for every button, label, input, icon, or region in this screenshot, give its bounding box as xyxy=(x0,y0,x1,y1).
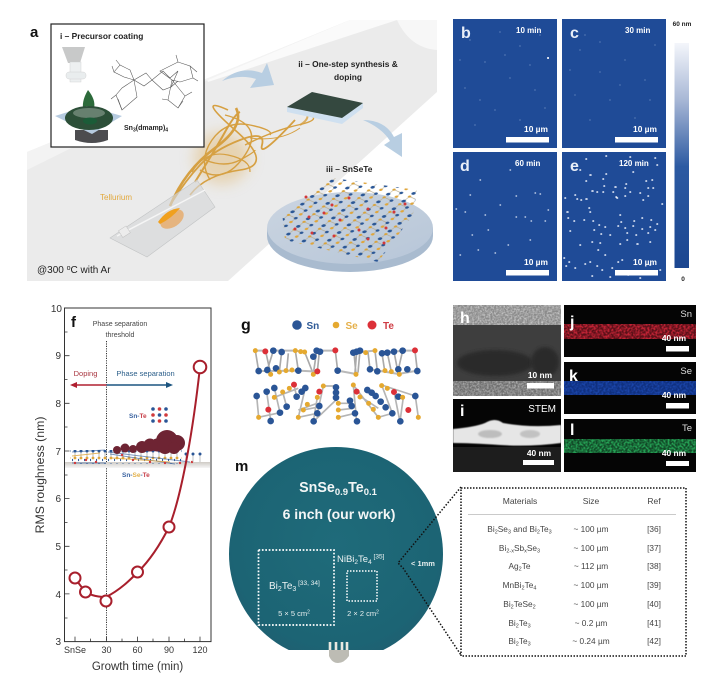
NiBi2Te4 label: NiBi xyxy=(337,554,354,565)
SnSeTe film on disc xyxy=(267,170,433,272)
table rows: ~ 100 µm xyxy=(574,524,609,534)
AFM map c: c xyxy=(570,25,579,42)
x axis tick labels: 120 xyxy=(192,645,208,655)
AFM map d: d xyxy=(460,158,470,175)
panel: j Sn EDS map: 40 nm xyxy=(662,333,686,343)
table rows: 2 xyxy=(516,642,519,648)
label: temperature and gas: @300 xyxy=(37,265,64,276)
2x2 size label: 2 xyxy=(376,610,379,616)
arrow: synthesis to film xyxy=(363,120,402,157)
table rows: 3 xyxy=(528,642,531,648)
y axis tick labels xyxy=(51,304,62,648)
table header: Materials xyxy=(503,496,537,506)
AFM map c xyxy=(562,19,666,148)
Bi2Te3 label: 3 xyxy=(292,586,296,593)
substrate wafer ii xyxy=(287,92,363,124)
panel: g crystal structure xyxy=(241,317,418,422)
table rows: Sb xyxy=(514,543,524,553)
NiBi2Te4 label: Te xyxy=(358,554,368,565)
heading: one-step synthesis: ii – One-step synthesis & xyxy=(298,59,398,69)
x axis tick labels: SnSe xyxy=(64,645,86,655)
y axis title: RMS roughness (nm) xyxy=(33,417,47,533)
table rows: x xyxy=(524,548,527,554)
x axis tick labels xyxy=(64,645,208,655)
panel: j Sn EDS map: Sn xyxy=(680,309,692,320)
panel: k Se EDS map xyxy=(564,362,696,414)
AFM map b xyxy=(453,19,557,148)
table rows: Se xyxy=(498,524,508,534)
table rows: 3 xyxy=(549,530,552,536)
panel: h TEM image: 10 nm xyxy=(528,370,552,380)
doping arrow: Doping xyxy=(74,369,97,378)
y axis tick labels: 9 xyxy=(55,351,61,362)
panel: k Se EDS map: Se xyxy=(680,366,692,377)
wafer title: Te xyxy=(348,480,364,496)
wafer disc xyxy=(229,447,443,663)
Sn-Se-Te label: Sn-Se-Te xyxy=(122,472,150,479)
table rows: Te xyxy=(525,580,534,590)
table rows: Bi xyxy=(487,524,495,534)
panel label f: f xyxy=(71,314,77,331)
table rows: 4 xyxy=(533,586,536,592)
plot frame and ticks xyxy=(64,308,211,642)
table rows: 2 xyxy=(533,604,536,610)
table rows xyxy=(487,524,661,648)
5x5 size label: 2 xyxy=(307,610,310,616)
threshold label xyxy=(93,321,147,339)
legend: Sn Se Te: Sn xyxy=(306,321,319,332)
panel: j Sn EDS map xyxy=(564,305,696,357)
table rows: [42] xyxy=(647,636,661,646)
table rows: 2 xyxy=(519,566,522,572)
table rows: 2-x xyxy=(506,548,514,554)
table rows: 3 xyxy=(528,624,531,630)
table rows: Te xyxy=(522,561,531,571)
2x2 dotted region xyxy=(347,571,377,601)
SnSeTe film with phase-separated clusters xyxy=(65,430,210,468)
table rows: ~ 100 µm xyxy=(574,599,609,609)
label: Sn3(dmamp)4: 4 xyxy=(165,128,168,134)
AFM map d: 10 µm xyxy=(524,257,548,267)
panel label a: a xyxy=(30,24,39,41)
Sn-Te cluster label and lattice: Sn-Te xyxy=(129,413,147,420)
y axis tick labels: 10 xyxy=(51,304,62,315)
wafer title: 0.9 xyxy=(335,487,348,498)
table rows: [38] xyxy=(647,561,661,571)
5x5 dotted region xyxy=(258,550,334,625)
panel: l Te EDS map xyxy=(564,419,696,472)
table rows: [39] xyxy=(647,580,661,590)
table rows: and Bi xyxy=(511,524,537,534)
tellurium vapor plume xyxy=(170,106,314,206)
heading: SnSeTe: iii – SnSeTe xyxy=(326,164,373,174)
table rows: 2 xyxy=(495,530,498,536)
icon: precursor drop xyxy=(83,90,94,110)
y axis tick labels: 8 xyxy=(55,399,61,410)
NiBi2Te4 label: [35] xyxy=(372,554,385,560)
AFM map e: e xyxy=(570,158,579,175)
legend: Sn Se Te: Te xyxy=(383,321,394,332)
table header: Size xyxy=(583,496,600,506)
atomic lattice xyxy=(255,350,418,422)
legend: Sn Se Te: Se xyxy=(346,321,358,332)
table rows: 2 xyxy=(522,586,525,592)
2x2 size label: 2 × 2 cm xyxy=(347,609,376,618)
y axis tick labels: 7 xyxy=(55,447,61,458)
x axis tick labels: 30 xyxy=(101,645,112,655)
panel: a synthesis schematic xyxy=(27,20,437,281)
wafer connector tab xyxy=(329,641,349,663)
panel: h TEM image xyxy=(453,305,561,396)
colour scale bar xyxy=(673,21,692,283)
table header xyxy=(503,496,661,506)
wafer size label: 6 inch (our work) xyxy=(283,506,395,522)
table rows: ~ 0.2 µm xyxy=(575,618,607,628)
comparison table xyxy=(461,488,686,656)
panel: k Se EDS map: 40 nm xyxy=(662,390,686,400)
data point markers xyxy=(70,361,206,606)
y axis tick labels: 5 xyxy=(55,542,61,553)
furnace tube floor xyxy=(27,20,437,281)
x axis title: Growth time (min) xyxy=(92,661,183,673)
table rows: [36] xyxy=(647,524,661,534)
AFM map c: 30 min xyxy=(625,26,650,35)
panel label m: m xyxy=(235,458,248,475)
table header: Ref xyxy=(647,496,661,506)
table rows: ~ 112 µm xyxy=(574,561,608,571)
table rows: 2 xyxy=(516,624,519,630)
panel: i STEM image: i xyxy=(460,403,464,420)
table dotted frame xyxy=(461,488,686,656)
panel: f roughness chart xyxy=(33,304,211,673)
NiBi2Te4 label: 4 xyxy=(368,559,372,566)
table rows: Bi xyxy=(503,599,511,609)
phase separation arrow xyxy=(106,369,175,388)
y axis tick labels: 3 xyxy=(55,637,61,648)
threshold label: Phase separation xyxy=(93,321,147,328)
arrow: precursor to synthesis xyxy=(222,63,274,88)
icon: syringe filter xyxy=(62,47,86,82)
panel: i STEM image: 40 nm xyxy=(527,448,551,458)
AFM map b: b xyxy=(461,25,471,42)
threshold label: threshold xyxy=(106,332,135,339)
wafer title: 0.1 xyxy=(364,487,378,498)
phase separation arrow: Phase separation xyxy=(116,369,175,378)
table rows: [41] xyxy=(647,618,661,628)
table rows: ~ 100 µm xyxy=(574,543,609,553)
AFM map c: 10 µm xyxy=(633,124,657,134)
NiBi2Te4 label: 2 xyxy=(354,559,358,566)
table rows: 3 xyxy=(508,530,511,536)
table rows: Te xyxy=(540,524,549,534)
panel: l Te EDS map: 40 nm xyxy=(662,448,686,458)
legend: Sn Se Te xyxy=(292,320,394,332)
Bi2Te3 label: Bi xyxy=(269,581,278,592)
AFM map d xyxy=(453,152,557,281)
panel: i STEM image: STEM xyxy=(528,404,556,415)
colour scale bar: 0 xyxy=(681,276,685,283)
icon: spin coater with substrate xyxy=(55,106,122,143)
table rows: [40] xyxy=(647,599,661,609)
x axis tick labels: 60 xyxy=(132,645,143,655)
AFM map b: 10 min xyxy=(516,26,541,35)
molecule: Sn3(dmamp)4 structure xyxy=(111,55,198,110)
table rows: 2 xyxy=(537,530,540,536)
table rows: Te xyxy=(519,636,528,646)
zoom connector lines xyxy=(398,487,461,655)
label: Sn3(dmamp)4: 3 xyxy=(133,128,136,134)
table rows: ~ 100 µm xyxy=(574,580,609,590)
table rows: Bi xyxy=(508,636,516,646)
label: Sn3(dmamp)4: Sn xyxy=(124,125,133,132)
panel: i STEM image xyxy=(453,399,561,472)
panel: l Te EDS map: l xyxy=(570,422,574,439)
doping arrow xyxy=(70,369,106,388)
panel label g: g xyxy=(241,317,251,334)
x axis tick labels: 90 xyxy=(164,645,174,655)
AFM map e: 120 min xyxy=(619,159,649,168)
table rows: 3 xyxy=(537,548,540,554)
table rows: Ag xyxy=(509,561,519,571)
Bi2Te3 label: Te xyxy=(282,581,293,592)
Sn-Te cluster label and lattice xyxy=(129,409,166,421)
label: Tellurium: Tellurium xyxy=(100,193,132,202)
quartz boat with tellurium xyxy=(110,180,215,257)
small area label: < 1mm xyxy=(411,559,435,568)
tellurium dopant atoms xyxy=(295,197,405,243)
label: temperature and gas: o xyxy=(67,265,71,272)
heading: doping: doping xyxy=(334,72,362,82)
AFM map d: 60 min xyxy=(515,159,540,168)
label: temperature and gas: C with Ar xyxy=(71,265,111,276)
AFM map e xyxy=(562,152,666,281)
AFM map b: 10 µm xyxy=(524,124,548,134)
wafer title: SnSe xyxy=(299,480,335,496)
colour scale bar: 60 nm xyxy=(673,21,692,28)
panel: h TEM image: h xyxy=(460,310,470,327)
table rows: Te xyxy=(519,618,528,628)
threshold dotted line xyxy=(106,341,108,641)
panel: m wafer xyxy=(229,447,461,663)
5x5 size label: 5 × 5 cm xyxy=(278,609,307,618)
table rows: Bi xyxy=(508,618,516,628)
label: Sn3(dmamp)4: (dmamp) xyxy=(136,125,165,132)
panel: l Te EDS map: Te xyxy=(682,423,692,434)
heading: precursor coating: i – Precursor coating xyxy=(60,31,143,41)
Bi2Te3 label: 2 xyxy=(278,586,282,593)
table rows: 2 xyxy=(511,604,514,610)
table rows: Bi xyxy=(499,543,506,553)
table rows: TeSe xyxy=(514,599,533,609)
table rows: MnBi xyxy=(503,580,522,590)
table rows: ~ 0.24 µm xyxy=(572,636,610,646)
panel: b-e AFM maps xyxy=(453,19,692,283)
AFM map e: 10 µm xyxy=(633,257,657,267)
y axis tick labels: 4 xyxy=(55,590,61,601)
inset: precursor coating xyxy=(51,24,204,147)
Bi2Te3 label: [33, 34] xyxy=(296,580,320,587)
table rows: [37] xyxy=(647,543,661,553)
table rows: Se xyxy=(527,543,537,553)
y axis tick labels: 6 xyxy=(55,494,61,505)
panel: j Sn EDS map: j xyxy=(569,314,574,331)
roughness curve xyxy=(75,367,200,597)
panel: k Se EDS map: k xyxy=(569,368,578,385)
